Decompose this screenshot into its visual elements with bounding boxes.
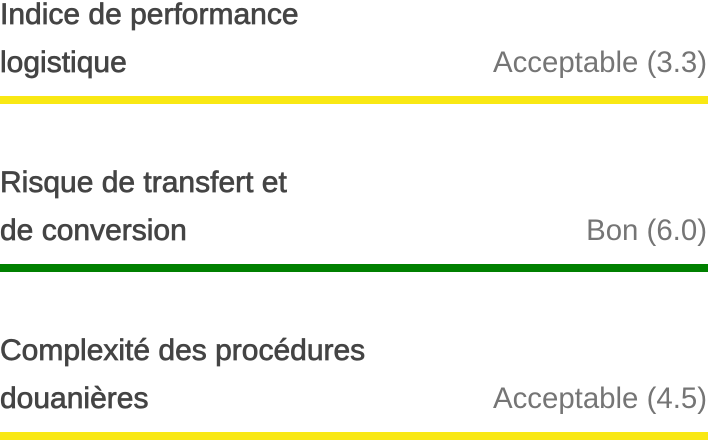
rating value: good 6.0: Bon (6.0) xyxy=(586,214,707,247)
panel: logistics performance index xyxy=(0,0,708,104)
heading: logistics performance index: logistique xyxy=(0,46,127,79)
heading: transfer and conversion risk xyxy=(0,166,287,247)
rating bar: green xyxy=(0,264,708,272)
heading: customs procedure complexity xyxy=(0,334,365,415)
heading: transfer and conversion risk: de conversion xyxy=(0,214,187,247)
rating bar: yellow xyxy=(0,432,708,440)
heading: customs procedure complexity: Complexité des procédures xyxy=(0,334,365,367)
rating value: acceptable 3.3: Acceptable (3.3) xyxy=(493,46,707,79)
heading: logistics performance index xyxy=(0,0,299,79)
panel: customs procedure complexity xyxy=(0,334,708,440)
rating value: acceptable 4.5: Acceptable (4.5) xyxy=(493,382,707,415)
panel: transfer and conversion risk xyxy=(0,166,708,272)
heading: customs procedure complexity: douanières xyxy=(0,382,148,415)
rating bar: yellow xyxy=(0,96,708,104)
heading: transfer and conversion risk: Risque de transfert et xyxy=(0,166,287,199)
